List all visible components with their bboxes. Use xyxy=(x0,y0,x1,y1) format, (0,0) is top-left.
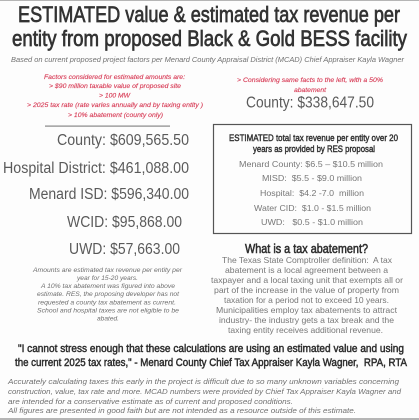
disclaimer: Accurately calculating taxes this early in the project is difficult due to so many unknown variables concerning xyxy=(7,377,400,386)
entity values list: Menard ISD: $596,340.00 xyxy=(29,186,189,203)
disclaimer: All figures are presented in good faith but are not intended as a resource outside of this estimate. xyxy=(7,406,356,415)
entity values list: UWD: $57,663.00 xyxy=(69,241,180,258)
tax abatement definition: industry- the industry gets a tax break and the xyxy=(219,316,394,325)
tax abatement definition: abatement is a local agreement between a xyxy=(225,266,388,275)
disclaimer: construction, value, tax rate and more. MCAD numbers were provided by Chief Tax Appraiser Kayla Wagner and xyxy=(8,387,402,396)
box rows xyxy=(239,159,383,227)
entity values list: Hospital District: $461,088.00 xyxy=(3,160,189,177)
tax abatement definition xyxy=(211,256,403,335)
amounts note: Amounts are estimated tax revenue per entity per xyxy=(32,267,183,274)
tax abatement definition: The Texas State Comptroller definition: A tax xyxy=(222,256,392,265)
amounts note: School and hospital taxes are not eligible to be xyxy=(37,308,180,314)
box heading: years as provided by RES proposal xyxy=(253,144,375,154)
amounts note: A 10% tax abatement was figured into above xyxy=(40,283,176,290)
50% abatement note xyxy=(237,77,383,94)
50% abatement note: > Considering same facts to the left, with a 50% xyxy=(237,77,383,84)
amounts note: estimate. RES, the proposing developer has not xyxy=(37,291,179,298)
factors list: > 10% abatement (county only) xyxy=(68,112,163,119)
box rows: UWD: $0.5 - $1.0 million xyxy=(261,217,363,227)
factors list xyxy=(27,74,203,119)
quote xyxy=(15,343,407,369)
entity values list: WCID: $95,868.00 xyxy=(67,214,182,231)
tax abatement definition: taxation for a period not to exceed 10 years. xyxy=(224,296,389,305)
box rows: MISD: $5.5 - $9.0 million xyxy=(262,173,362,183)
county value at 50% abatement: County: $338,647.50 xyxy=(246,94,374,112)
box rows: Hospital: $4.2 -7.0 million xyxy=(260,188,364,198)
factors list: > 100 MW xyxy=(99,92,131,100)
tax abatement definition: part of the increase in the value of property from xyxy=(214,286,399,295)
amounts note: abated. xyxy=(97,316,119,323)
tax abatement definition: Municipalities employ tax abatements to attract xyxy=(216,306,398,315)
factors list: > 2025 tax rate (rate varies annually and by taxing entity ) xyxy=(27,102,203,109)
amounts note: year for 15-20 years. xyxy=(76,275,138,282)
title xyxy=(12,2,407,51)
tax abatement definition: taxing entity receives additional revenue. xyxy=(228,326,383,335)
factors list: Factors considered for estimated amounts are: xyxy=(44,74,185,81)
heading: what is a tax abatement: What is a tax abatement? xyxy=(245,241,368,256)
disclaimer xyxy=(7,377,402,415)
entity values list: County: $609,565.50 xyxy=(57,132,189,149)
tax abatement definition: taxpayer and a local taxing unit that exempts all or xyxy=(211,276,403,285)
amounts note xyxy=(32,267,183,323)
factors list: > $90 million taxable value of proposed site xyxy=(49,83,181,90)
amounts note: requested a county tax abatement as current. xyxy=(38,300,176,306)
panel: total tax revenue over 20 years xyxy=(214,124,412,234)
box heading xyxy=(229,133,398,154)
entity values list xyxy=(3,132,189,258)
box rows: Water CID: $1.0 - $1.5 million xyxy=(254,203,371,213)
subtitle: Based on current proposed project factors per Menard County Appraisal District (MCAD) Chief Appraiser Kayla Wagner xyxy=(11,57,405,64)
box rows: Menard County: $6.5 – $10.5 million xyxy=(239,159,383,169)
50% abatement note: abatement xyxy=(294,87,327,94)
disclaimer: are intended for a conservative estimate as of current and proposed conditions. xyxy=(8,397,293,406)
